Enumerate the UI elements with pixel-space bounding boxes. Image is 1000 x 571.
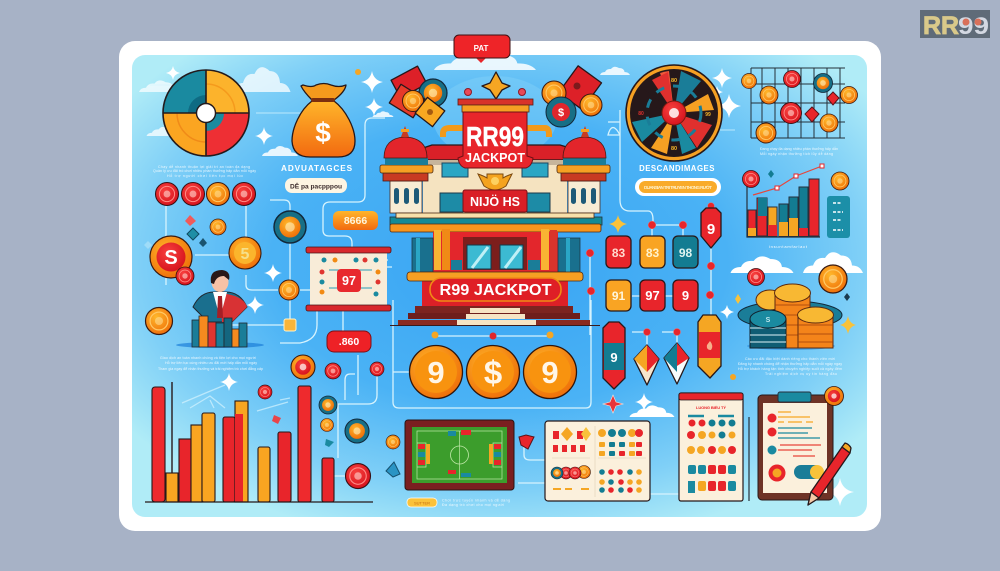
coin row	[156, 182, 256, 206]
text block: top left: Quản lý ưu đãi trò chơi nhiều phần thưởng hấp dẫn mỗi ngày	[153, 168, 256, 173]
pill label: DÊ pa pacpppou	[290, 182, 342, 190]
card: score sheet: LUONG BIỂU TÝ	[696, 405, 726, 410]
number tiles	[606, 236, 698, 311]
large coin S	[150, 236, 194, 285]
right tower	[557, 126, 610, 213]
caption: insuntamfarlact	[769, 244, 808, 249]
tile 91 orange: 91	[612, 289, 625, 303]
roulette wheel: 80	[671, 78, 677, 84]
pill orange	[635, 178, 721, 196]
main sign RR99 Jackpot: RR99	[466, 121, 524, 152]
small orange tag	[407, 498, 437, 507]
base and balcony	[407, 272, 583, 307]
front orange stack	[798, 307, 834, 348]
top label PAT	[454, 35, 510, 63]
coin small	[279, 280, 299, 300]
coin dollar sign: $	[484, 354, 502, 391]
red star	[603, 395, 623, 413]
text block: lower right: Trải nghiệm dịch vụ uy tín hàng đầu	[765, 372, 837, 376]
heading: advantages: ADVUATAGCES	[281, 164, 353, 173]
banner: R99 Jackpot	[430, 278, 561, 301]
top label PAT: PAT	[474, 44, 489, 53]
scroll chart 97: 97	[342, 274, 356, 288]
clipboard	[758, 386, 844, 500]
text block: lower left	[158, 356, 263, 371]
small orange tag: SUTTER	[414, 500, 430, 506]
divider stick	[748, 417, 750, 501]
text block: top left: Hỗ trợ người chơi liên tục mọi lúc	[167, 173, 243, 178]
coin 5	[229, 237, 261, 269]
white card	[119, 41, 881, 531]
text block: grid caption: Đang chạy đa dạng nhiều phần thưởng hấp dẫn	[760, 146, 838, 151]
text block: tablet caption: Chơi trực tuyến nhanh và dễ dàng	[442, 498, 510, 502]
badge 8666	[333, 211, 378, 230]
logo: RR99	[920, 10, 990, 40]
bar chart right	[742, 164, 849, 237]
text block: lower right	[738, 357, 842, 376]
clouds right	[730, 252, 863, 273]
text block: lower right: Các ưu đãi đặc biệt dành riêng cho thành viên mới	[745, 357, 835, 361]
red envelopes left	[389, 66, 447, 127]
badge 8666: 8666	[344, 215, 367, 227]
steps	[390, 306, 600, 326]
red envelopes right	[542, 66, 602, 127]
tile 98 teal: 98	[679, 246, 692, 260]
heading: descandimages: DESCANDIMAGES	[639, 164, 715, 173]
ribbon orange	[698, 315, 721, 378]
red pill 860	[327, 331, 371, 352]
sign NIJO HS	[463, 190, 527, 212]
icon: small tag	[284, 319, 296, 331]
finial dots	[464, 88, 526, 96]
icon: money bag	[292, 84, 355, 157]
blue panel	[132, 55, 867, 517]
main sign RR99 Jackpot	[458, 99, 533, 168]
icon: businessman with bars	[176, 270, 264, 348]
roulette wheel: 99	[705, 112, 711, 118]
tall orange stack	[774, 284, 810, 348]
tablet soccer field	[405, 420, 514, 490]
emblem	[478, 174, 512, 190]
pie chart	[163, 70, 249, 156]
pill label	[285, 178, 347, 193]
coin dollar sign	[466, 346, 520, 398]
bar chart bottom left	[145, 382, 373, 502]
coin stacks	[738, 284, 842, 350]
main sign RR99 Jackpot: JACKPOT	[465, 151, 525, 165]
orange arms	[443, 128, 549, 137]
large coin S: S	[164, 247, 178, 269]
logo: RR99: RR	[923, 12, 959, 40]
coin 9 right	[524, 346, 576, 398]
coin 5: 5	[241, 246, 250, 263]
background clouds and sparkles	[139, 52, 854, 506]
upper facade	[423, 160, 567, 213]
text block: lower right: Đăng ký nhanh chóng để nhận thưởng hấp dẫn mỗi ngày ngay	[738, 361, 842, 366]
kite right	[664, 343, 689, 384]
small coins and diamonds	[144, 215, 226, 249]
ribbon 9 red	[701, 208, 721, 248]
tile 83 red: 83	[612, 246, 625, 260]
tile 9 red: 9	[682, 288, 689, 303]
coin 9	[410, 346, 462, 398]
text block: grid caption	[760, 146, 838, 156]
card: score sheet	[679, 393, 743, 501]
text block: lower left: Tham gia ngay để nhận thưởng và trải nghiệm trò chơi đẳng cấp	[158, 366, 263, 371]
red pill 860: .860	[339, 336, 359, 348]
coin 9: 9	[427, 355, 445, 390]
coins above bar chart	[258, 355, 400, 488]
roof bands	[390, 213, 602, 232]
sparkle gold	[609, 215, 627, 233]
icon: money bag: $	[315, 117, 331, 148]
stack coins and accents	[735, 265, 856, 334]
scroll chart 97	[306, 247, 391, 311]
text block: grid caption: Mỗi ngày nhận thưởng tích lũy dễ dàng	[760, 151, 833, 156]
text block: lower right: Hỗ trợ khách hàng tận tình chuyên nghiệp suốt cả ngày đêm	[738, 366, 842, 371]
card: lottery table	[545, 421, 650, 501]
sign NIJO HS: NIJÖ HS	[470, 194, 520, 209]
coin dollar	[146, 308, 172, 334]
ribbon teal: 9	[610, 350, 618, 365]
icon: pen	[808, 443, 851, 505]
coin 9 right: 9	[541, 355, 559, 390]
ribbon teal	[603, 322, 625, 389]
text block: lower left: Giao dịch an toàn nhanh chóng và tiện lợi cho mọi người	[160, 356, 256, 360]
lower floor	[412, 229, 580, 272]
building: RR99 jackpot	[380, 35, 610, 326]
tile 97 red: 97	[645, 288, 660, 303]
red roof	[423, 145, 570, 160]
text block: tablet caption	[442, 498, 510, 507]
decorative chart lines	[182, 385, 290, 411]
red envelopes right: $	[558, 107, 564, 119]
text block: lower left: Hỗ trợ liên tục cùng nhiều ưu đãi mới hấp dẫn mỗi ngày	[165, 360, 257, 365]
three big coins	[410, 332, 576, 398]
text block: top left	[153, 164, 256, 178]
roulette wheel: 80	[671, 146, 677, 152]
grid with coins	[742, 68, 858, 143]
ribbon 9 red: 9	[707, 221, 715, 238]
teal coin	[274, 211, 306, 243]
roulette wheel: 80	[638, 111, 644, 117]
roulette wheel	[626, 65, 722, 161]
connector dots	[586, 203, 715, 336]
pill orange: DUANSIAN TRI TRUYEN THONG RƯỚT	[644, 183, 712, 190]
banner: R99 Jackpot: R99 JACKPOT	[440, 282, 552, 299]
front teal stack: S	[766, 317, 771, 324]
tile 83 orange: 83	[646, 246, 659, 260]
connector lines	[150, 85, 735, 494]
left tower	[380, 126, 433, 213]
small red tag near tablet	[519, 435, 534, 449]
teal legend card	[827, 196, 850, 238]
star	[482, 72, 510, 99]
text block: top left: Chạy dễ nhanh thuận lợi giải trí an toàn đa dạng	[158, 164, 250, 169]
kite left	[634, 345, 659, 385]
text block: tablet caption: Đa dạng trò chơi cho mọi người	[442, 503, 504, 507]
logo: RR99: 99	[958, 13, 989, 40]
